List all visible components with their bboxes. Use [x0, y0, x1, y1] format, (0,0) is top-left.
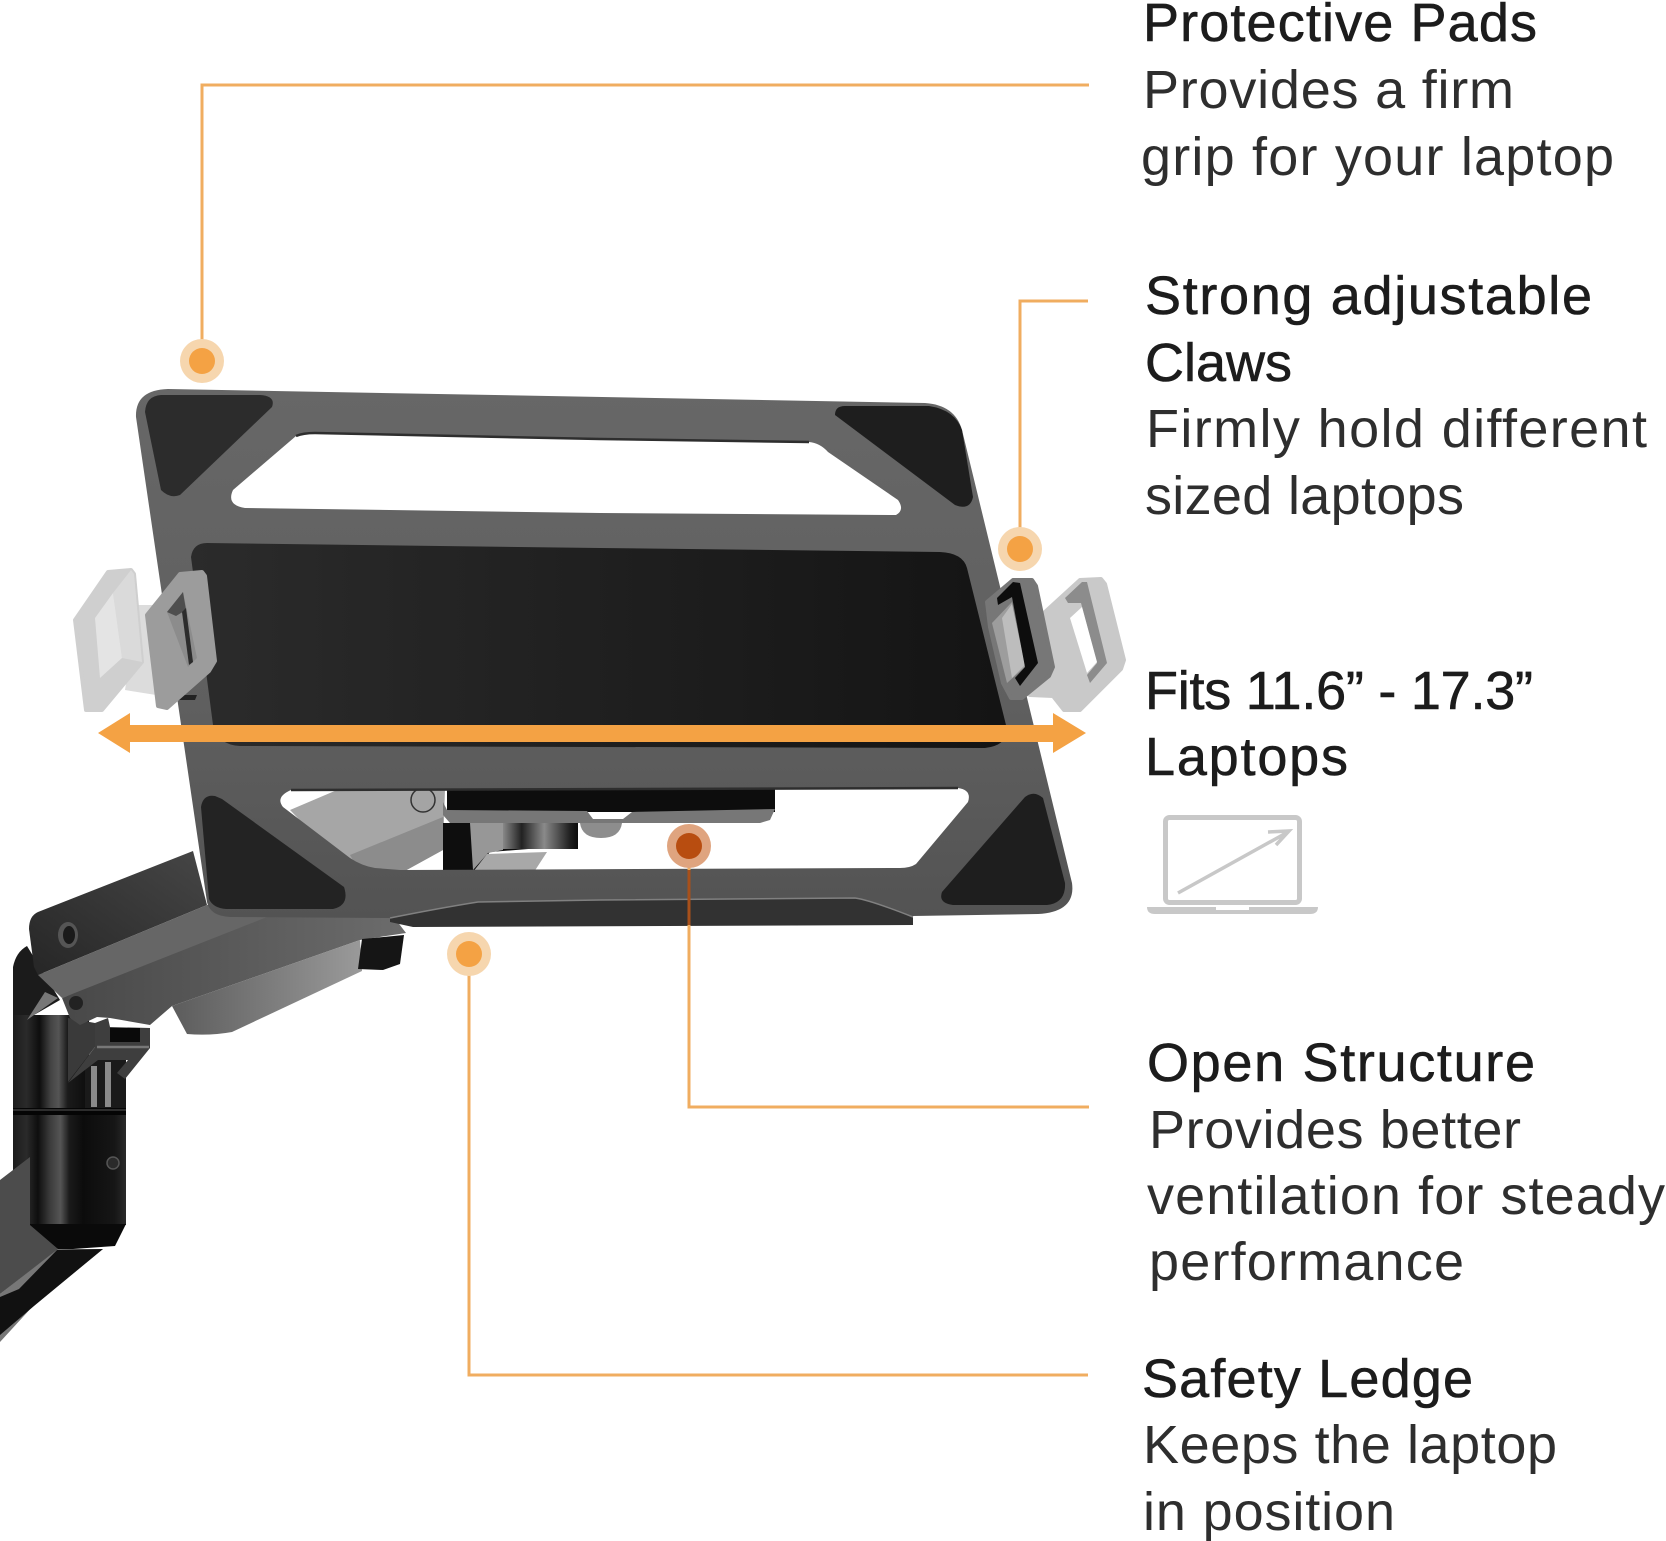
- heading: Claws: [1145, 333, 1292, 393]
- arm middle face: [62, 912, 406, 1025]
- heading: [1145, 661, 1533, 787]
- arm underside pad: [172, 940, 362, 1035]
- body: Keeps the laptop: [1143, 1415, 1557, 1475]
- leader: safety ledge: [447, 932, 1088, 1375]
- leader: open structure: [667, 824, 1089, 1107]
- icon: laptop with diagonal arrow: [1147, 818, 1318, 914]
- outer left claw: [75, 570, 142, 710]
- central black pad: [191, 543, 1007, 748]
- body: ventilation for steady: [1147, 1166, 1665, 1226]
- body: Firmly hold different: [1146, 399, 1647, 459]
- lower bolt: [69, 996, 83, 1010]
- arm bolt: [58, 922, 78, 948]
- bracket wing: [68, 1018, 95, 1082]
- protective corner pads: [145, 395, 1065, 909]
- bracket joint: [68, 1018, 150, 1083]
- heading: [1145, 266, 1592, 393]
- lower arm underside: [0, 1249, 103, 1342]
- leader: protective pads: [180, 85, 1089, 383]
- lower arm face: [0, 1157, 58, 1294]
- heading: Open Structure: [1147, 1033, 1535, 1093]
- body: in position: [1143, 1482, 1395, 1541]
- arm top face: [29, 851, 207, 975]
- safety ledge: [390, 898, 913, 927]
- inner left claw: [147, 572, 215, 708]
- callout: adjustable claws: [1145, 266, 1647, 526]
- heading: Safety Ledge: [1142, 1349, 1473, 1409]
- callout: protective pads: [1141, 0, 1614, 187]
- column: [13, 946, 126, 1249]
- width arrow: [98, 713, 1086, 753]
- hole edge shading: [291, 433, 958, 790]
- marker: safety ledge: [447, 932, 491, 976]
- callout: safety ledge: [1142, 1349, 1557, 1541]
- heading: Strong adjustable: [1145, 266, 1592, 326]
- marker: protective pads: [180, 339, 224, 383]
- body: [1147, 1100, 1665, 1292]
- body: Provides better: [1149, 1100, 1521, 1160]
- callout: open structure: [1147, 1033, 1665, 1292]
- pad: bottom left: [201, 796, 346, 909]
- marker: open structure: [667, 824, 711, 868]
- pad: top right: [835, 406, 973, 507]
- body: [1143, 1415, 1557, 1541]
- heading: Fits 11.6” - 17.3”: [1145, 661, 1533, 721]
- body: Provides a firm: [1143, 60, 1514, 120]
- mounting bracket: [443, 788, 775, 872]
- leader: claws: [998, 301, 1088, 571]
- body: performance: [1149, 1232, 1464, 1292]
- callout: laptop fit: [1145, 661, 1533, 914]
- connector bar: [125, 605, 156, 695]
- tray plate: [136, 389, 1072, 918]
- inner right claw: [987, 580, 1053, 698]
- body: sized laptops: [1145, 466, 1464, 526]
- body: [1145, 399, 1647, 526]
- body: grip for your laptop: [1141, 127, 1614, 187]
- body: [1141, 60, 1614, 187]
- monitor arm: [0, 788, 775, 1342]
- pad: bottom right: [941, 794, 1065, 905]
- arm strip face: [38, 905, 400, 998]
- arm upper section seen through opening: [290, 788, 445, 872]
- pad: top left: [145, 395, 273, 496]
- right claws: [987, 579, 1124, 710]
- outer right claw: [1030, 579, 1124, 710]
- heading: Laptops: [1145, 727, 1348, 787]
- marker: claws: [998, 527, 1042, 571]
- silver joint spike: [27, 992, 58, 1020]
- left claws: [75, 570, 156, 710]
- arm black block: [358, 935, 404, 970]
